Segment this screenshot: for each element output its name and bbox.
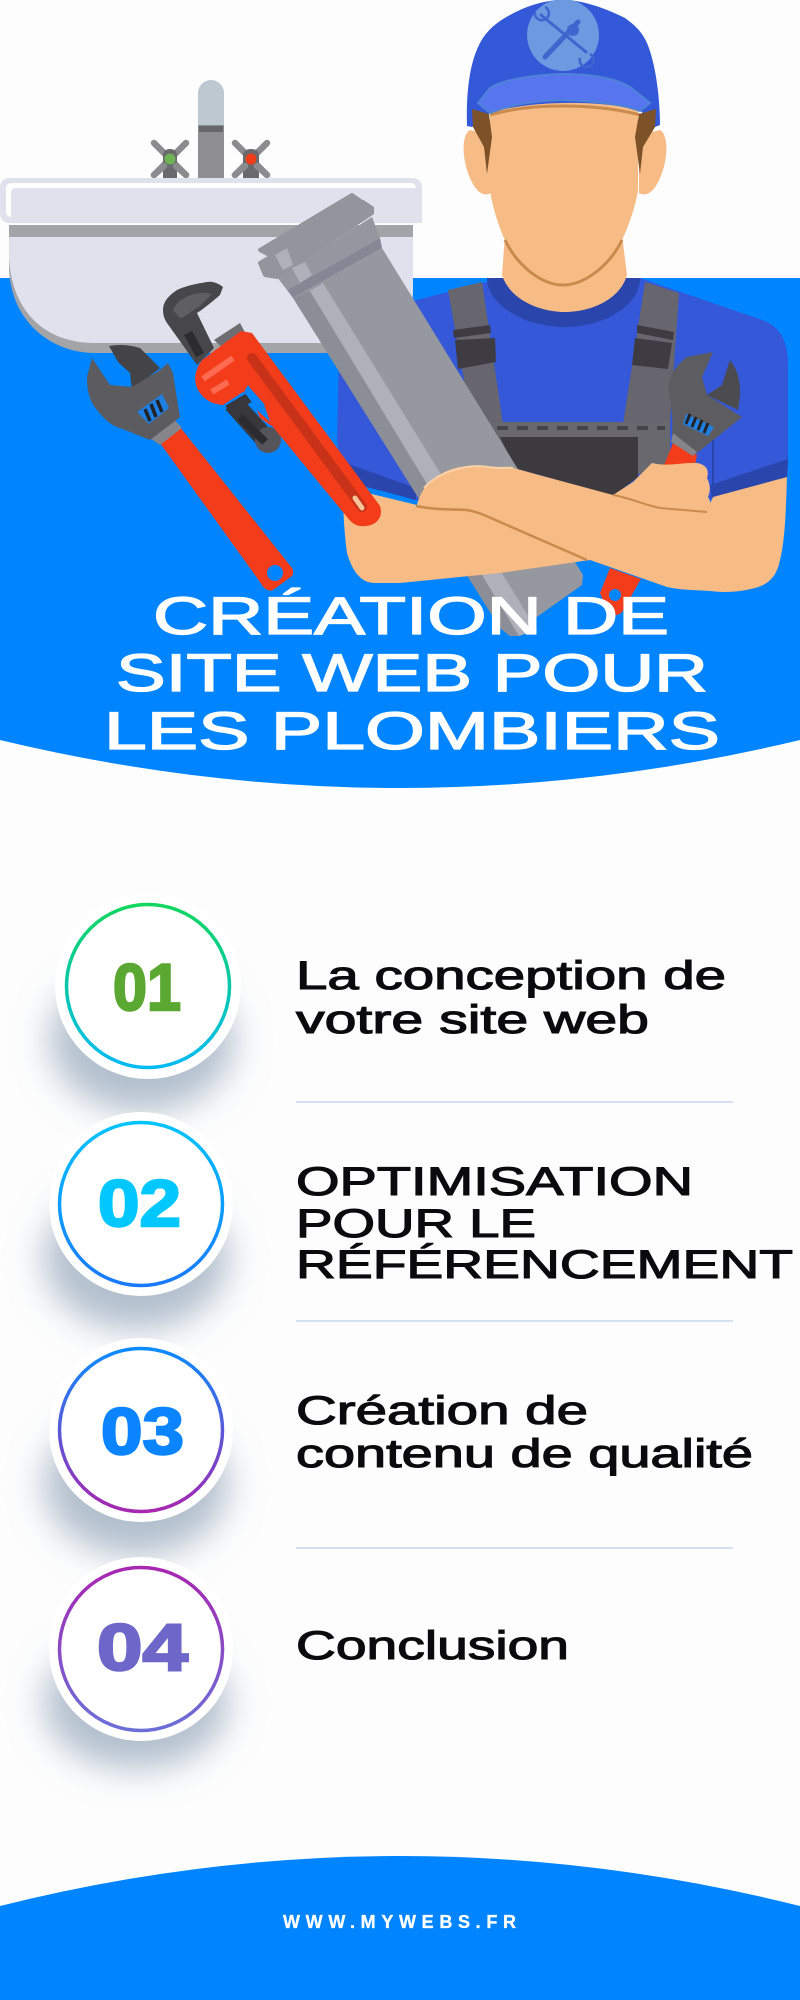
arm highlight — [424, 466, 513, 488]
collar — [150, 415, 182, 445]
item 02 label: OPTIMISATION — [296, 1160, 693, 1204]
cap visor — [478, 74, 650, 113]
pipe — [260, 195, 583, 636]
slot — [355, 498, 362, 508]
title: SITE WEB POUR — [116, 644, 708, 703]
item 02 label: POUR LE — [296, 1202, 536, 1246]
item 03 label — [296, 1389, 753, 1476]
adjustment teeth — [683, 414, 714, 436]
item 04 label: Conclusion — [296, 1624, 569, 1668]
handle — [160, 427, 293, 591]
item 01 label — [296, 954, 726, 1042]
hand crease — [613, 495, 707, 512]
item 03 — [44, 1338, 233, 1556]
title: CRÉATION DE — [153, 587, 669, 646]
item 01 — [50, 893, 241, 1112]
item 02 — [44, 1112, 233, 1330]
arm crease — [416, 506, 587, 560]
cap badge — [527, 0, 599, 71]
item 03 label: Création de — [296, 1389, 588, 1433]
pipe highlight — [310, 283, 537, 636]
footer blue panel — [0, 1856, 800, 2000]
title — [104, 587, 720, 761]
bib pocket — [500, 437, 638, 496]
sleeve fold — [712, 437, 714, 510]
header blue panel — [0, 278, 800, 788]
cap — [467, 0, 660, 127]
pipe collar — [260, 195, 382, 298]
right jaw — [707, 360, 740, 410]
collar — [671, 433, 697, 456]
bib top band — [480, 422, 670, 474]
face — [490, 100, 638, 285]
footer website url: WWW.MYWEBS.FR — [283, 1912, 516, 1932]
head — [668, 352, 742, 453]
jaw line — [505, 240, 622, 285]
illustration: sink — [0, 80, 422, 353]
collar — [487, 278, 640, 327]
ears — [464, 130, 666, 194]
item 01: 01 — [113, 950, 181, 1024]
handle — [663, 443, 697, 468]
item 02 label — [296, 1160, 793, 1287]
title: LES PLOMBIERS — [104, 702, 720, 761]
window — [244, 385, 265, 410]
crossed arms — [343, 463, 787, 592]
highlights — [203, 358, 233, 392]
pipe wrench — [163, 282, 381, 526]
adjustable wrench — [87, 345, 293, 591]
pipe shadow edge — [293, 291, 519, 636]
illustration: plumber — [337, 0, 788, 510]
basin — [9, 225, 413, 353]
neck — [502, 235, 627, 312]
sink rim — [0, 178, 422, 223]
tap handle: red — [235, 143, 267, 178]
red body — [195, 331, 381, 526]
head — [87, 358, 180, 440]
saw jaw — [214, 323, 248, 350]
item 04 — [44, 1557, 233, 1769]
groove — [252, 358, 362, 507]
item 01 label: votre site web — [296, 998, 649, 1042]
faucet — [198, 80, 224, 178]
overall straps — [448, 282, 679, 424]
hair — [472, 109, 656, 174]
sleeve cuffs — [340, 459, 788, 500]
adjustment teeth — [137, 394, 169, 424]
hook jaw — [163, 282, 223, 365]
wrench held by plumber — [600, 352, 742, 615]
pipe body — [293, 248, 583, 636]
stitches — [497, 426, 665, 430]
item 04: 04 — [97, 1610, 188, 1684]
threaded screw — [233, 403, 268, 442]
item 03: 03 — [101, 1394, 184, 1468]
upper jaw — [109, 345, 160, 390]
item 02: 02 — [98, 1166, 181, 1240]
item 01 label: La conception de — [296, 954, 726, 998]
shirt — [337, 278, 788, 500]
tap handle: green — [154, 143, 186, 178]
strap buckles — [453, 325, 674, 369]
collar light marks — [275, 248, 312, 283]
item 02 label: RÉFÉRENCEMENT — [296, 1242, 793, 1287]
lower handle end — [600, 568, 641, 615]
item 03 label: contenu de qualité — [296, 1432, 753, 1476]
